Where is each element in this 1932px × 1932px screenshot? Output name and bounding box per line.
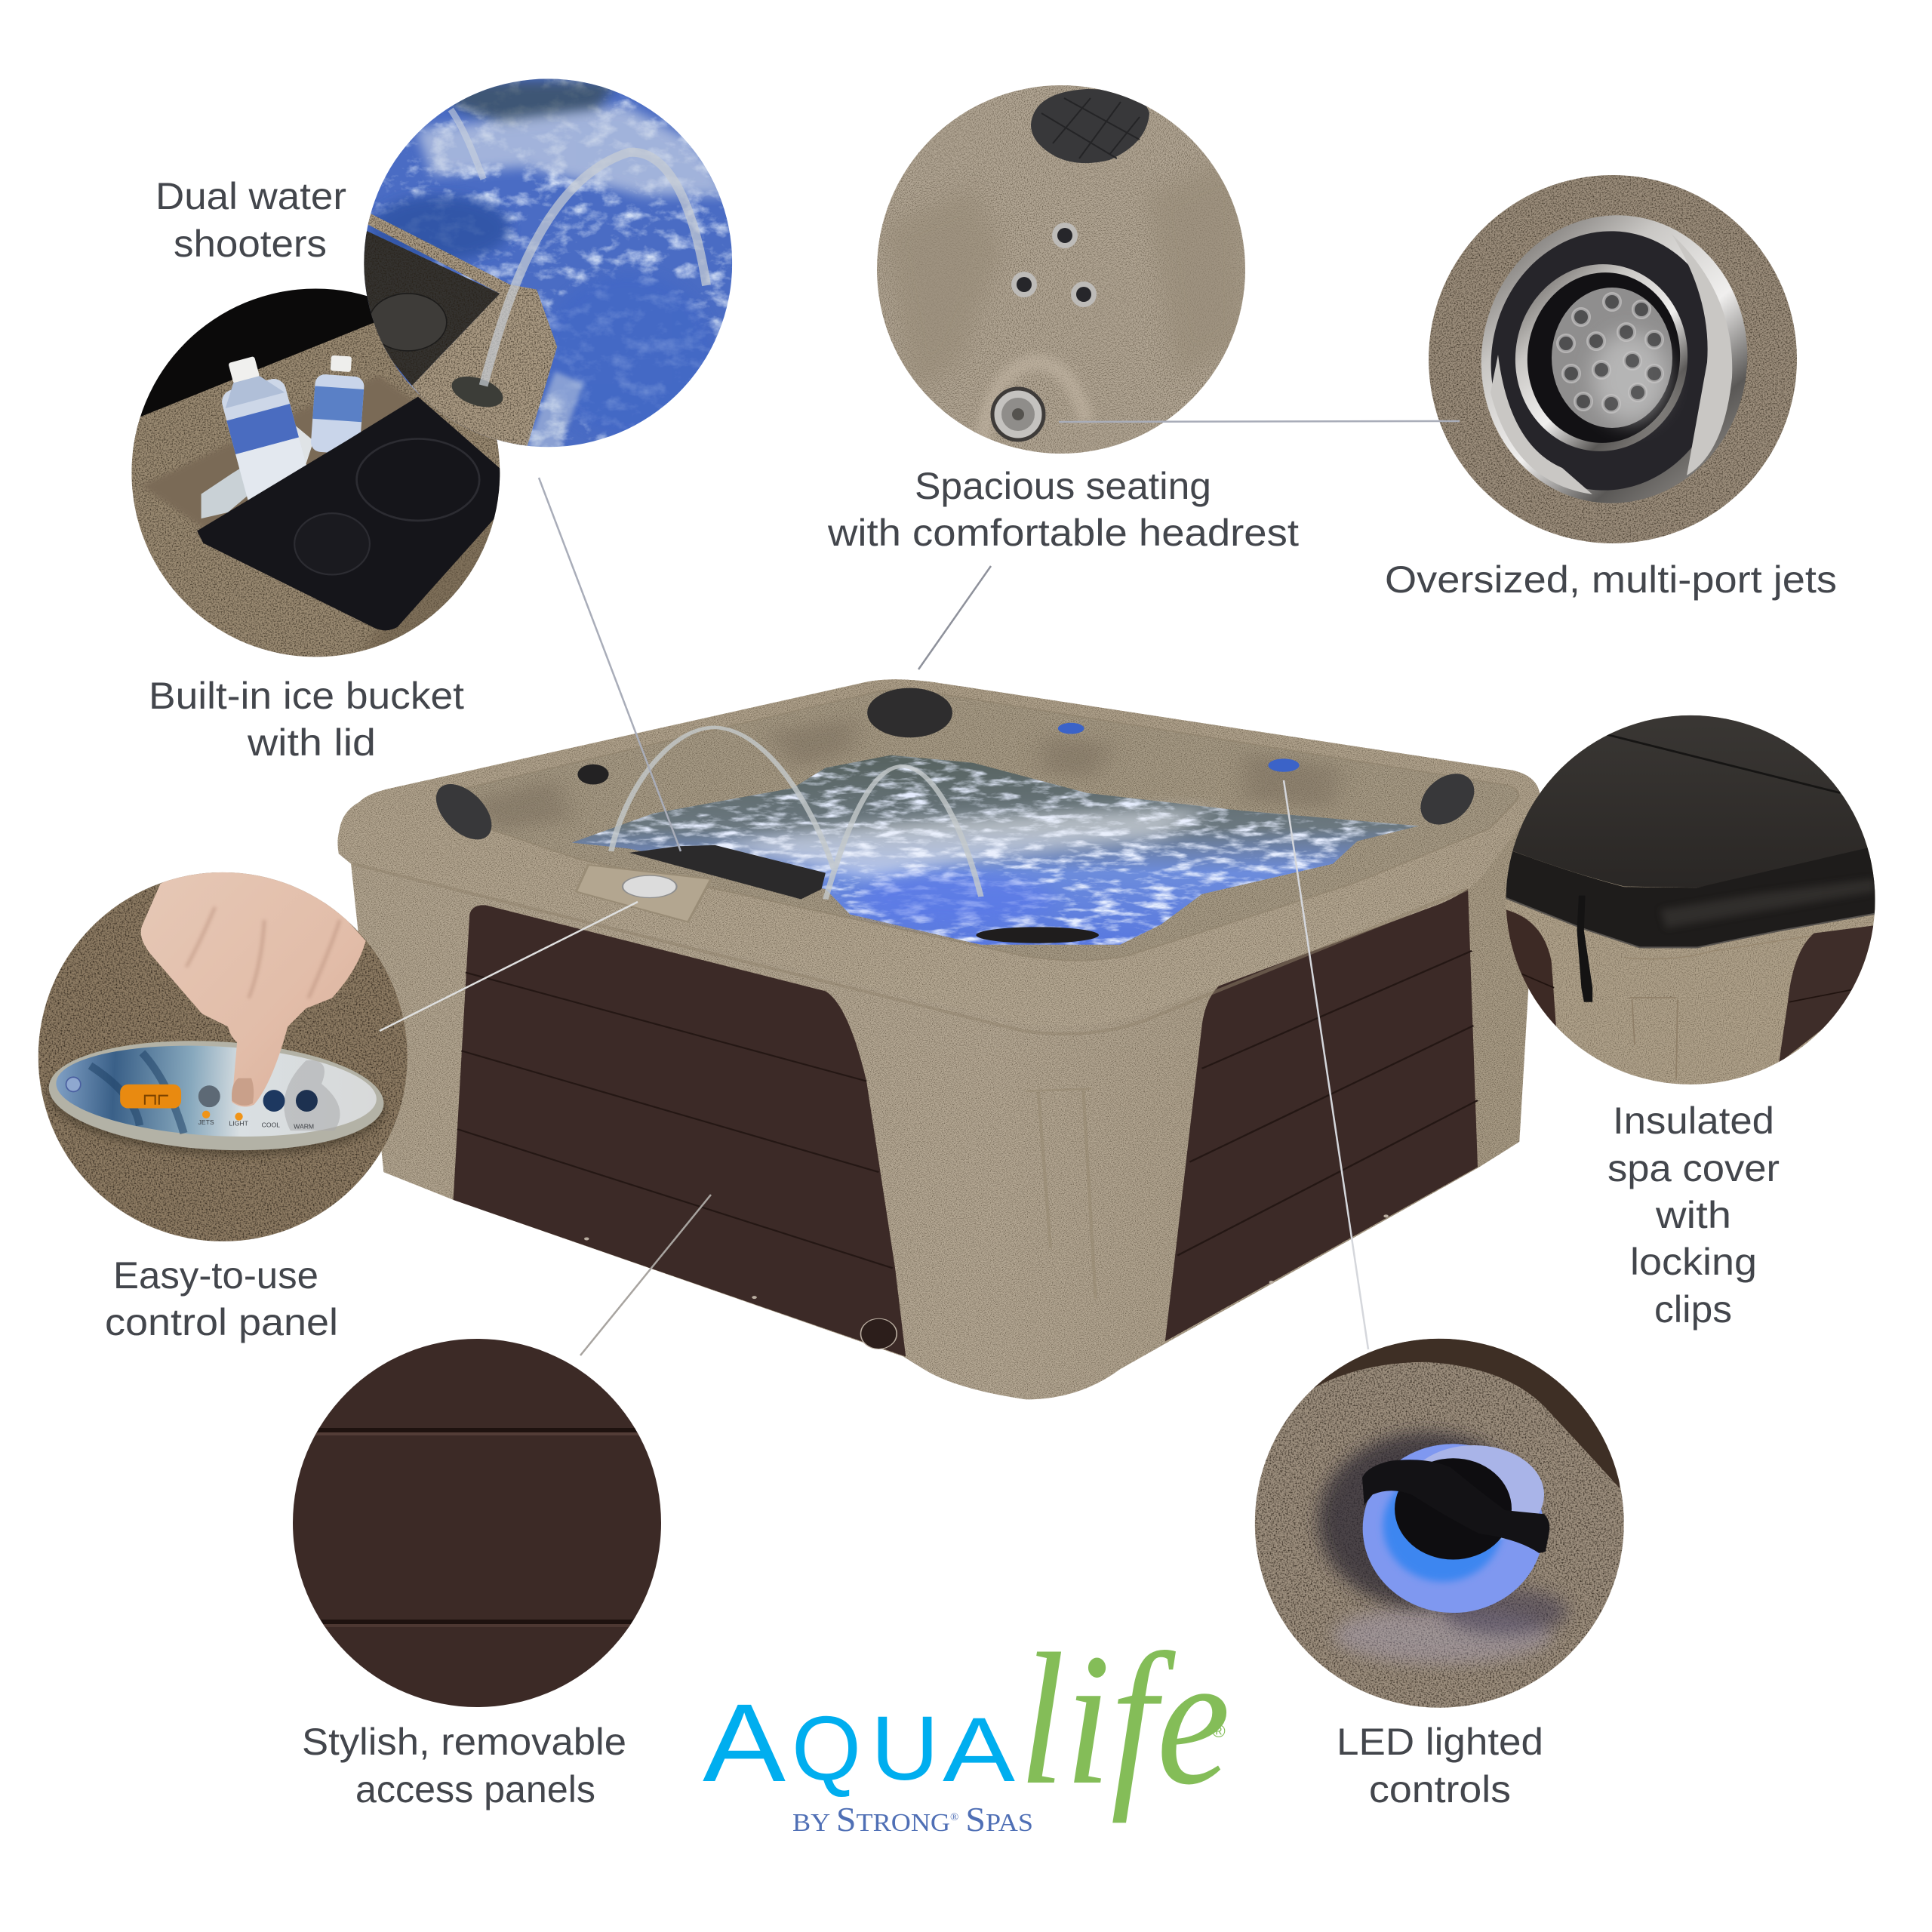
inner lip highlight: [437, 690, 1518, 960]
label: control panel: [105, 1254, 338, 1343]
light led: [235, 1112, 243, 1121]
logo word life: life: [1019, 1615, 1230, 1824]
lower foam: [527, 371, 583, 449]
label: spacious seating: [827, 465, 1299, 554]
circle: access panels: [293, 1339, 661, 1707]
label: dual water shooters: [155, 175, 346, 265]
jets led: [202, 1111, 210, 1118]
left access panel: [454, 905, 906, 1356]
panel labels: JETS: [198, 1118, 214, 1126]
right water bottle: [310, 354, 366, 455]
leader line: water shooters: [539, 478, 681, 851]
jets button: [198, 1085, 220, 1107]
small jet left: [1011, 272, 1037, 297]
hand: [141, 870, 366, 1106]
panel swirl: [91, 1053, 184, 1134]
lid logo circle: [357, 438, 479, 521]
well wall: [437, 688, 1525, 965]
leader line: access panels: [580, 1195, 711, 1355]
label: insulated cover: with: [1655, 1194, 1731, 1236]
small jet top: [1052, 223, 1078, 248]
panel labels: LIGHT: [229, 1120, 249, 1128]
amber display: [120, 1084, 181, 1109]
logo tagline: BY STRONG: [792, 1801, 945, 1838]
knob base: [1395, 1458, 1512, 1560]
front bubbles: [711, 808, 1210, 879]
right panel seam: [1789, 985, 1875, 1002]
label: insulated cover: [1607, 1100, 1780, 1331]
ice cubes: [202, 420, 314, 518]
cover top: [1506, 712, 1875, 888]
spa tub photo: [337, 679, 1540, 1399]
tan rim: [131, 322, 506, 657]
jet nozzles: [1558, 294, 1663, 412]
spa well: [437, 688, 1525, 965]
right headrest: [1411, 770, 1484, 829]
left headrest: [425, 780, 503, 844]
jet face: [1552, 288, 1672, 428]
cover hem: [1506, 898, 1875, 947]
top dark water: [441, 81, 617, 126]
left panel seam: [1518, 972, 1554, 988]
knob handle: [1362, 1460, 1549, 1553]
logo word AQUA: Q: [792, 1697, 861, 1799]
label: control panel: control panel: [105, 1301, 338, 1343]
second jet stream: [451, 109, 484, 179]
panel labels: COOL: [262, 1121, 280, 1129]
logo: AquaLife by Strong Spas: [703, 1615, 1230, 1838]
label: built-in ice bucket: [149, 675, 464, 764]
small jet right: [1071, 281, 1097, 307]
left water bottle: [212, 350, 312, 503]
pale glow: [1334, 1607, 1552, 1663]
deep blue pool: [543, 273, 715, 437]
power button: [66, 1077, 81, 1092]
dark socket shadow: [1318, 1432, 1537, 1609]
label: insulated cover: clips: [1654, 1288, 1732, 1331]
label: access panels: access panels: [355, 1768, 595, 1810]
label: LED controls: controls: [1369, 1768, 1511, 1810]
black background: [131, 288, 500, 452]
outer chrome ring: [1463, 198, 1766, 521]
water: [572, 755, 1419, 945]
right brown panel: [1779, 925, 1875, 1063]
panel bezel: [46, 1033, 386, 1158]
tub body shell: [337, 679, 1540, 1399]
logo word AQUA: U: [871, 1697, 939, 1799]
logo word AQUA: A: [703, 1681, 786, 1805]
moulding: [1630, 998, 1678, 1078]
dark corner: [1297, 1339, 1620, 1488]
circle: dual water shooters: [361, 78, 732, 449]
circle: insulated spa cover: [1506, 712, 1875, 1084]
seat surface: [877, 85, 1245, 454]
well seat shading: [466, 717, 1341, 831]
cover front edge: [1506, 846, 1875, 947]
blue glow: [858, 874, 1054, 924]
leader line: control panel: [380, 902, 638, 1031]
label: dual water shooters: shooters: [174, 223, 327, 265]
label: LED controls: [1337, 1721, 1543, 1810]
dark blue: [371, 195, 510, 261]
label: insulated cover: Insulated: [1613, 1100, 1774, 1142]
water arc: [484, 152, 706, 386]
lower seam: [293, 1620, 661, 1624]
black lid: [197, 397, 506, 630]
stone surface: [38, 872, 408, 1241]
front headrest: [976, 927, 1099, 943]
panel labels: [198, 1118, 314, 1130]
blue ring bright: [1383, 1470, 1503, 1582]
tan ledge: [367, 214, 557, 449]
logo tagline: PAS: [986, 1809, 1030, 1837]
leader line: LED controls: [1284, 780, 1368, 1349]
upper seam highlight: [293, 1432, 661, 1435]
label: built-in ice bucket: Built-in ice bucket: [149, 675, 464, 717]
shadow lower right: [1443, 1588, 1567, 1635]
label: built-in ice bucket: with lid: [247, 721, 376, 764]
lower tub shell: [1506, 715, 1875, 1084]
water shooter arcs: [611, 728, 981, 899]
right access panel: [1165, 887, 1478, 1341]
water nozzle ring: [448, 371, 507, 413]
left brown panel: [1506, 910, 1557, 1035]
label: insulated cover: locking: [1630, 1241, 1757, 1283]
upper seam: [293, 1428, 661, 1432]
circle: built-in ice bucket: [131, 288, 506, 657]
panel light swirl: [284, 1060, 340, 1131]
label: access panels: Stylish, removable: [302, 1721, 626, 1763]
led control right: [1268, 758, 1300, 772]
blue ring: [1363, 1444, 1543, 1613]
tub rim shadow: [1624, 936, 1811, 959]
back headrest: [867, 688, 952, 737]
logo tagline: S: [965, 1801, 986, 1838]
circle: LED lighted controls: [1255, 1339, 1624, 1708]
inner black recess: [1519, 265, 1688, 451]
black lid corner: [361, 228, 500, 386]
warm button: [296, 1090, 318, 1112]
circle: multi-port jet: [1429, 175, 1797, 543]
circle: control panel: [38, 870, 408, 1241]
label: oversized jets: Oversized, multi-port jets: [1385, 558, 1837, 601]
cover highlight: [1660, 878, 1875, 928]
leader line: seating: [918, 566, 991, 669]
left control knob: [577, 764, 609, 784]
lower seam highlight: [293, 1624, 661, 1627]
lid cup circle: [369, 294, 447, 351]
logo word AQUA: A: [943, 1698, 1015, 1801]
locking clip strap: [1577, 896, 1592, 1002]
circle: spacious seating: [877, 85, 1245, 454]
control recess: [576, 865, 711, 922]
control panel oval: [623, 875, 677, 897]
label: dual water shooters: Dual water: [155, 175, 346, 217]
corner moulding: [1026, 1089, 1096, 1298]
rim top: [339, 679, 1540, 1026]
label: LED controls: LED lighted: [1337, 1721, 1543, 1763]
stone surface: [1255, 1339, 1624, 1708]
stone surround: [1429, 175, 1797, 543]
logo word AQUA: [703, 1681, 1015, 1805]
screws: [584, 1214, 1389, 1299]
brand badge: [861, 1318, 897, 1349]
label: access panels: [302, 1721, 626, 1810]
label: spacious seating: with comfortable headrest: [827, 512, 1299, 554]
cool button: [263, 1090, 285, 1112]
rim lip shadow: [352, 864, 1468, 1034]
leader line: jets: [1059, 421, 1460, 422]
bucket well: [142, 375, 424, 531]
ring upper soft band: [1404, 1445, 1544, 1544]
led control back: [1058, 723, 1084, 734]
bright foam band: [416, 106, 731, 195]
headrest pillow: [1031, 89, 1149, 163]
registered mark: ®: [1212, 1721, 1226, 1742]
water surface: [364, 78, 732, 447]
panel face: [54, 1038, 379, 1144]
label: insulated cover: spa cover: [1607, 1147, 1780, 1189]
ice bucket lid: [629, 845, 826, 899]
panel wood: [293, 1339, 661, 1707]
cover seam: [1606, 734, 1840, 793]
panel drop shadow: [45, 1038, 388, 1164]
jet face highlight: [1592, 332, 1668, 423]
lid cup circle: [294, 513, 370, 574]
label: control panel: Easy-to-use: [113, 1254, 318, 1297]
panel labels: WARM: [294, 1122, 314, 1130]
chrome swirl highlight: [1491, 234, 1732, 494]
label: spacious seating: Spacious seating: [915, 465, 1211, 507]
black swirl band: [1475, 216, 1740, 506]
inner chrome ring: [1506, 256, 1697, 460]
lower stone shade: [361, 518, 494, 651]
seat footwell highlight: [981, 362, 1087, 453]
seat shading: [883, 151, 1245, 392]
large jet: [992, 389, 1044, 440]
logo tagline: ®: [950, 1812, 959, 1823]
